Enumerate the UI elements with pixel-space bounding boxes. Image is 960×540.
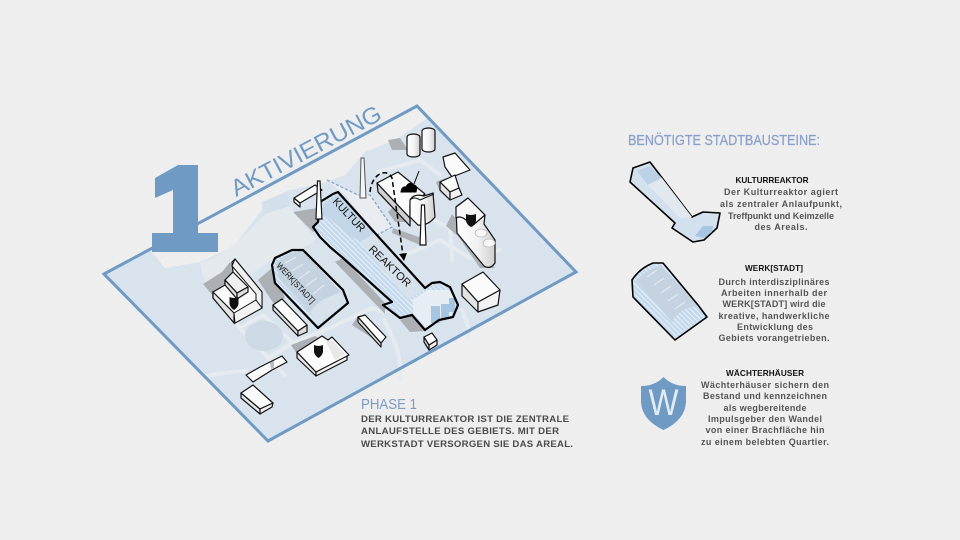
text block: Werkstadt: Durch interdisziplinäres [718, 277, 830, 287]
small building near chimney [294, 185, 322, 207]
text block: Kulturreaktor: des Areals. [754, 222, 808, 232]
icon: W shield on tall building [466, 214, 476, 227]
map border [104, 106, 576, 441]
building: small cube [424, 333, 437, 350]
icon: Werkstadt building [632, 263, 707, 340]
pale river band [263, 192, 290, 214]
chimney left [316, 181, 322, 219]
building: Wächterhaus tall silos [456, 198, 495, 267]
text block: Wächterhäuser: von einer Brachfläche hin [706, 425, 824, 435]
text block: Werkstadt [718, 264, 830, 343]
shield letter: W [648, 382, 679, 423]
icon: W shield on middle building [314, 345, 323, 358]
phase line 2: ANLAUFSTELLE DES GEBIETS. MIT DER [361, 426, 559, 437]
text block: Kulturreaktor: Der Kulturreaktor agiert [724, 187, 838, 197]
building: Wächterhaus middle [297, 336, 349, 376]
chimney back [360, 158, 366, 198]
building: bottom right block [462, 272, 500, 312]
label: WERK[STADT]: WERK[STADT] [275, 261, 317, 305]
heading: Benötigte Stadtbausteine: BENÖTIGTE STADTBAUSTEINE: [628, 131, 820, 149]
text block: Wächterhäuser: als wegbereitende [724, 403, 806, 413]
label: KULTUR: KULTUR [330, 196, 367, 235]
textured light quarter by the river [200, 206, 316, 285]
label: REAKTOR: REAKTOR [366, 244, 413, 290]
heading: AKTIVIERUNG: AKTIVIERUNG [226, 100, 386, 201]
Reaktor roof [360, 233, 425, 300]
roof ribs [285, 257, 324, 294]
street network [207, 160, 500, 380]
phase line 3: WERKSTADT VERSORGEN SIE DAS AREAL. [361, 439, 573, 450]
text block: Werkstadt: Gebiets vorangetrieben. [718, 333, 830, 343]
isometric site map [104, 106, 576, 441]
text block: Wächterhäuser: Impulsgeber den Wandel [708, 414, 822, 424]
text block: Werkstadt: WERK[STADT] wird die [722, 299, 826, 309]
text block: Werkstadt: Entwicklung des [737, 322, 813, 332]
phase line 1: DER KULTURREAKTOR IST DIE ZENTRALE [361, 414, 570, 425]
heading: KULTURREAKTOR [736, 176, 809, 185]
icon: Kulturreaktor building [630, 162, 720, 242]
map ground plane [104, 106, 576, 441]
text block: Wächterhäuser: Wächterhäuser sichern den [701, 380, 829, 390]
text block: Wächterhäuser: zu einem belebten Quartier. [701, 437, 829, 447]
light open area in upper left of the map [150, 106, 428, 268]
white towers facade [412, 290, 456, 328]
big numeral 1 [152, 165, 218, 252]
dashed arrow [370, 173, 407, 261]
silos [407, 128, 435, 157]
building: WERK[STADT] hall [272, 250, 348, 328]
building: long shed below Werkstadt [273, 299, 307, 336]
building: shed bottom [241, 385, 273, 414]
text block: Kulturreaktor: Treffpunkt und Keimzelle [728, 211, 834, 221]
text block: Kulturreaktor [720, 176, 842, 232]
building shadows [203, 138, 495, 354]
Kultur roof [323, 194, 375, 242]
chimney front [420, 205, 426, 245]
blue silos [431, 298, 455, 323]
icon: W shield on left building [230, 297, 238, 310]
building: Wächterhaus left [213, 259, 262, 323]
main building with cloud marker [377, 171, 435, 226]
text block: Wächterhäuser [701, 368, 829, 447]
building: L-shaped bar [246, 356, 287, 382]
heading: WERK[STADT] [745, 264, 803, 273]
heading: WÄCHTERHÄUSER [726, 368, 804, 378]
whitish zone of the dashed footprint [327, 180, 392, 235]
building: small bar [358, 315, 386, 347]
text block: Werkstadt: kreative, handwerkliche [718, 311, 830, 321]
text block: Kulturreaktor: als zentraler Anlaufpunkt, [720, 199, 842, 209]
icon: black cloud and flag [401, 171, 419, 192]
icon: W shield [641, 377, 686, 430]
dashed footprint of former chimney zone [327, 180, 392, 235]
text block: Werkstadt: Arbeiten innerhalb der [721, 288, 827, 298]
text block: phase 1 [361, 397, 573, 450]
small buildings top right [440, 153, 470, 200]
phase heading: PHASE 1 [361, 397, 417, 413]
text block: Wächterhäuser: Bestand und kennzeichnen [703, 391, 827, 401]
building: KULTURREAKTOR [313, 192, 458, 330]
